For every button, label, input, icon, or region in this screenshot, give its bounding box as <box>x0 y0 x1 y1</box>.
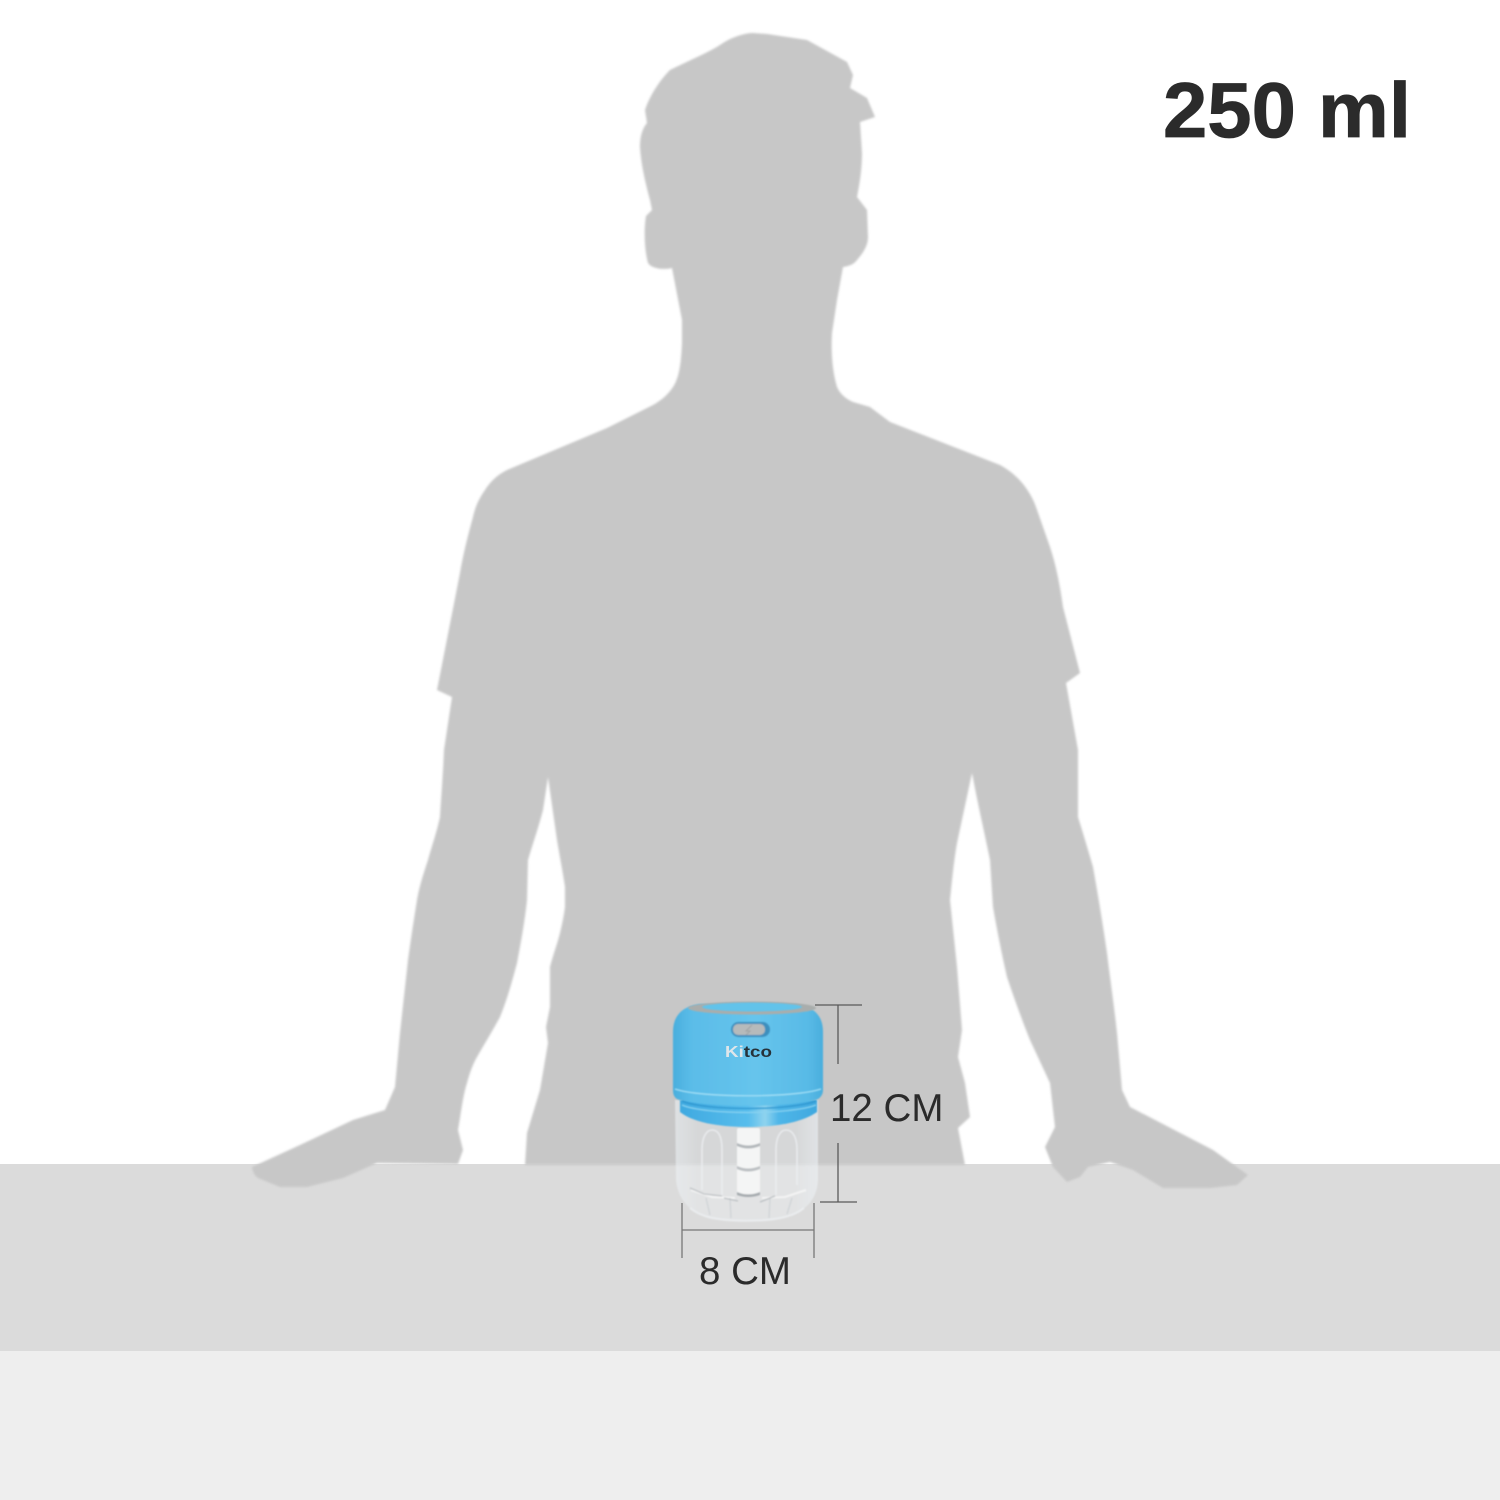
central shaft <box>737 1128 760 1197</box>
lid centre <box>702 1002 802 1012</box>
blue motor cap <box>673 1004 823 1106</box>
product: mini chopper <box>673 1002 823 1221</box>
brand logo: Kitco <box>725 1044 772 1061</box>
capacity heading: 250 ml <box>1163 66 1411 154</box>
height label: 12 CM <box>830 1087 943 1130</box>
grey lid ring <box>688 1002 816 1014</box>
power button <box>731 1022 770 1037</box>
width label: 8 CM <box>699 1250 791 1293</box>
height dimension line <box>815 1005 862 1202</box>
table front edge <box>0 1351 1500 1500</box>
table top surface <box>0 1164 1500 1351</box>
cap ridge lines <box>675 1089 821 1112</box>
transparent jar <box>675 1100 818 1221</box>
width dimension line <box>682 1203 814 1258</box>
human silhouette <box>252 33 1248 1188</box>
blades and inner ribs <box>690 1130 806 1218</box>
lower blue collar <box>680 1100 817 1127</box>
